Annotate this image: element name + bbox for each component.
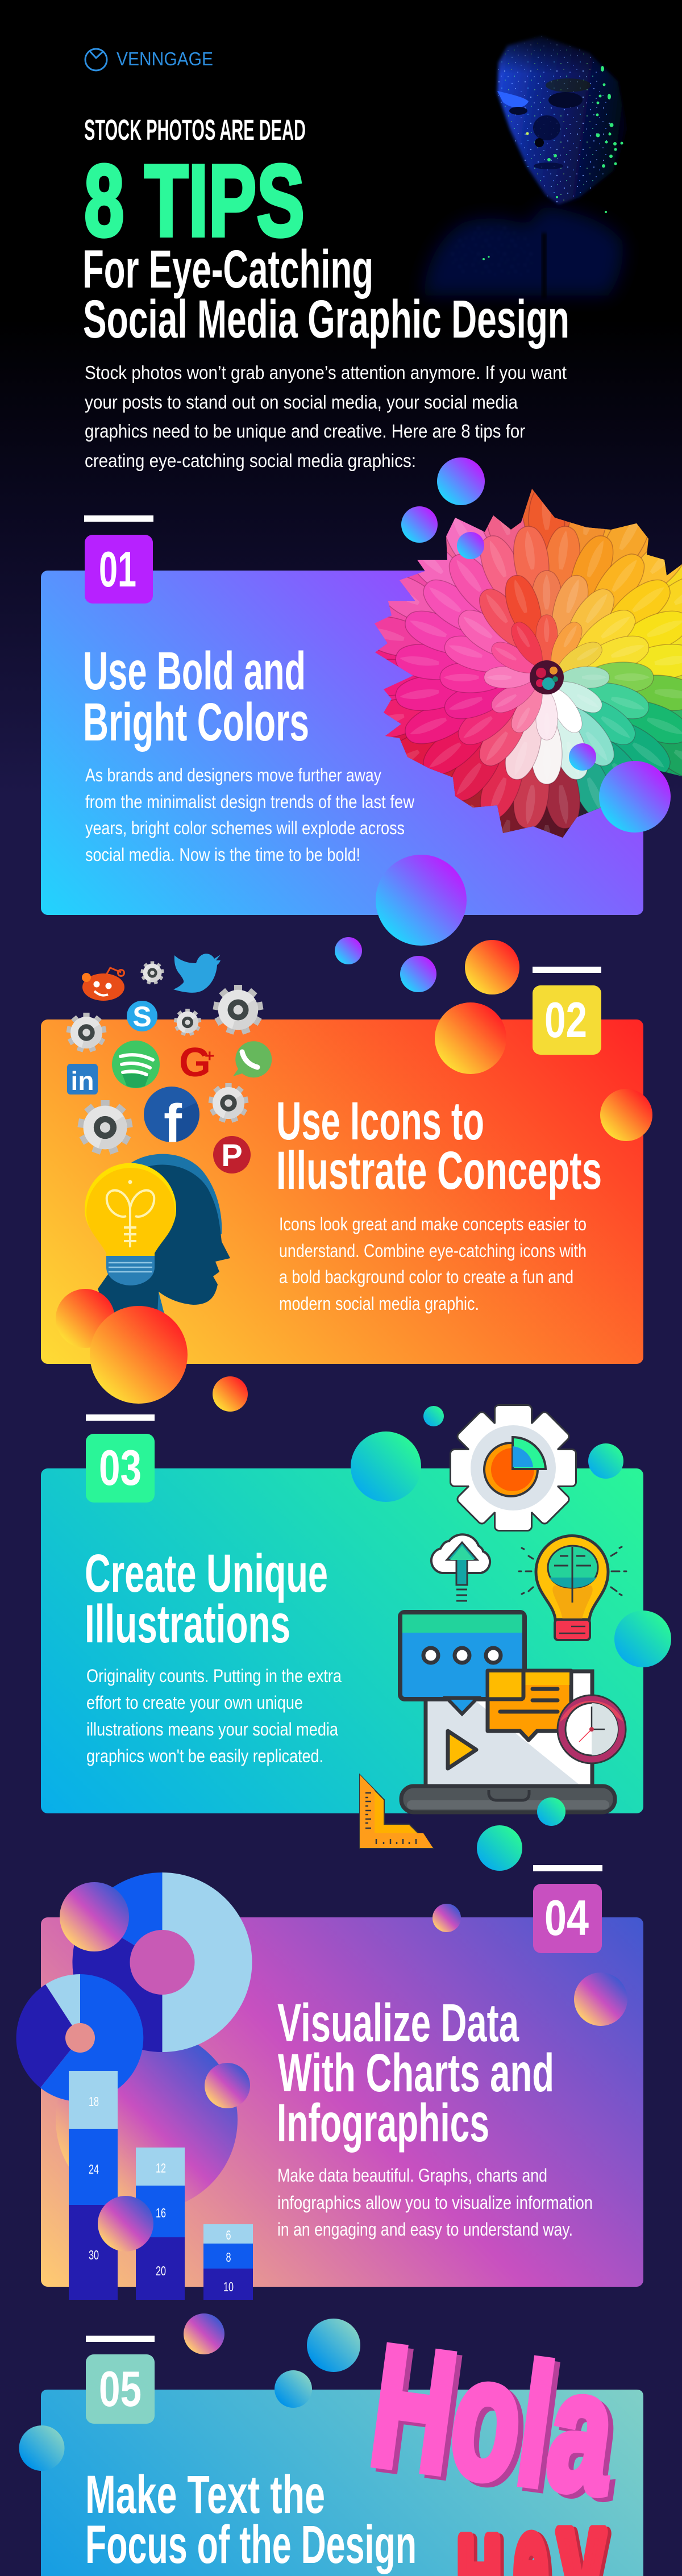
icon: Pinterest bbox=[213, 1136, 251, 1173]
header text block: creating eye-catching social media graphics: bbox=[85, 450, 416, 471]
body text bbox=[86, 1666, 342, 1766]
number bar bbox=[533, 967, 601, 973]
stacked bar chart: 6 bbox=[226, 2228, 231, 2242]
number bar bbox=[86, 1414, 155, 1421]
icon: Twitter bird bbox=[173, 954, 221, 993]
body text: understand. Combine eye-catching icons with bbox=[279, 1241, 587, 1261]
icon: set square ruler bbox=[360, 1775, 433, 1848]
heading: Use Bold and bbox=[83, 641, 306, 701]
icon: orange chat bubble bbox=[486, 1671, 571, 1740]
heading: With Charts and bbox=[278, 2043, 554, 2103]
body text: graphics won't be easily replicated. bbox=[86, 1746, 323, 1766]
panel background bbox=[41, 571, 643, 915]
number badge 02: 02 bbox=[544, 992, 587, 1048]
header text block: graphics need to be unique and creative. Here are 8 tips for bbox=[85, 421, 525, 442]
icon: Reddit bbox=[82, 968, 124, 1001]
heading: Bright Colors bbox=[83, 692, 309, 752]
body text: effort to create your own unique bbox=[86, 1692, 303, 1713]
number bar bbox=[84, 515, 153, 522]
icon: cloud upload bbox=[431, 1534, 490, 1601]
body text: infographics allow you to visualize information bbox=[277, 2192, 593, 2213]
panel: tip 2 bbox=[41, 940, 652, 1412]
decorative gradient circles bbox=[60, 1882, 627, 2354]
icon: laptop base bbox=[401, 1786, 615, 1812]
donut chart: large bbox=[72, 1872, 252, 2052]
icon: LinkedIn: in bbox=[71, 1066, 94, 1096]
icon: Pinterest: P bbox=[221, 1137, 243, 1173]
stacked bar chart bbox=[69, 2071, 253, 2300]
header text block: STOCK PHOTOS ARE DEAD bbox=[84, 114, 306, 146]
panel background bbox=[41, 1468, 643, 1813]
number badge 03 bbox=[86, 1434, 155, 1503]
body text: illustrations means your social media bbox=[86, 1719, 338, 1739]
panel background bbox=[41, 2390, 643, 2576]
stacked bar chart: 24 bbox=[89, 2162, 99, 2177]
large background circle bbox=[56, 2029, 238, 2211]
heading: Create Unique bbox=[85, 1543, 328, 1604]
icon: WhatsApp bbox=[233, 1041, 272, 1077]
body text bbox=[279, 1214, 587, 1314]
panel: tip 1 bbox=[41, 433, 682, 992]
decorative gradient circles bbox=[56, 940, 652, 1412]
icon: Skype: S bbox=[132, 1001, 152, 1033]
illustration: Hey lettering bbox=[458, 2525, 612, 2576]
icon: blue chat bubble bbox=[400, 1612, 525, 1714]
icon: Spotify bbox=[112, 1041, 160, 1088]
icon: Skype bbox=[127, 1001, 157, 1033]
heading: Visualize Data bbox=[277, 1993, 519, 2053]
number badge 05 bbox=[86, 2354, 155, 2424]
stacked bar chart: 10 bbox=[223, 2279, 234, 2294]
stacked bar chart: 18 bbox=[89, 2094, 99, 2109]
heading bbox=[277, 1993, 554, 2153]
body text: from the minimalist design trends of the last few bbox=[85, 792, 415, 812]
number bar bbox=[533, 1865, 602, 1871]
heading: Focus of the Design bbox=[85, 2515, 417, 2575]
decorative gradient circles bbox=[351, 1406, 671, 1667]
icon: play triangle bbox=[448, 1731, 476, 1768]
number badge 04 bbox=[533, 1884, 602, 1953]
logo: Venngage bbox=[85, 48, 213, 70]
icon: gear with pie chart bbox=[451, 1406, 575, 1530]
icon: gears bbox=[66, 962, 264, 1155]
decorative gradient circles bbox=[19, 2319, 360, 2471]
number badge 01 bbox=[85, 535, 153, 604]
photo: glowing speckled face bbox=[423, 31, 631, 298]
icon: Facebook: f bbox=[164, 1093, 182, 1154]
heading bbox=[85, 1543, 328, 1654]
heading bbox=[88, 2474, 415, 2574]
number bar bbox=[86, 2336, 155, 2342]
panel background bbox=[41, 1019, 643, 1364]
body text: in an engaging and easy to understand way. bbox=[277, 2219, 573, 2240]
header text block: your posts to stand out on social media, your social media bbox=[85, 392, 518, 413]
heading: Illustrations bbox=[85, 1594, 290, 1654]
icon: light bulb with brain bbox=[519, 1535, 626, 1640]
body text: Make data beautiful. Graphs, charts and bbox=[277, 2165, 547, 2186]
panel background bbox=[41, 1917, 643, 2287]
stacked bar chart: 8 bbox=[226, 2250, 231, 2265]
illustration: Hola lettering bbox=[371, 2342, 616, 2503]
number badge 03: 03 bbox=[99, 1439, 142, 1496]
header text block bbox=[82, 114, 569, 471]
number badge 05: 05 bbox=[99, 2361, 142, 2417]
icon: Facebook bbox=[144, 1087, 199, 1154]
header text block: For Eye-Catching bbox=[82, 239, 373, 299]
body text bbox=[277, 2165, 593, 2240]
panel: tip 5 bbox=[19, 2309, 643, 2576]
decorative gradient circles bbox=[477, 1797, 565, 1871]
header text block: 8 TIPS bbox=[84, 144, 305, 258]
icon: laptop screen bbox=[426, 1671, 592, 1788]
number badge 04: 04 bbox=[544, 1890, 589, 1946]
panel: tip 3 bbox=[41, 1406, 671, 1871]
header text block: Stock photos won’t grab anyone’s attention anymore. If you want bbox=[85, 362, 567, 383]
heading bbox=[83, 641, 309, 752]
stacked bar chart: 20 bbox=[156, 2263, 166, 2278]
body text: As brands and designers move further away bbox=[85, 765, 381, 785]
heading bbox=[276, 1091, 602, 1201]
donut chart: small bbox=[16, 1974, 143, 2101]
logo: Venngage: VENNGAGE bbox=[117, 48, 213, 69]
number badge 01: 01 bbox=[99, 541, 136, 597]
icon: clock bbox=[558, 1695, 626, 1763]
panel: tip 4 bbox=[16, 1865, 643, 2354]
decorative gradient circles bbox=[335, 457, 671, 992]
body text: years, bright color schemes will explode across bbox=[85, 818, 405, 838]
icon: Google Plus: + bbox=[205, 1047, 215, 1066]
body text: Originality counts. Putting in the extra bbox=[86, 1666, 342, 1686]
body text: social media. Now is the time to be bold! bbox=[85, 844, 360, 865]
heading: Infographics bbox=[277, 2093, 489, 2153]
heading: Make Text the bbox=[85, 2465, 325, 2525]
body text: modern social media graphic. bbox=[279, 1293, 479, 1314]
stacked bar chart: 30 bbox=[89, 2248, 99, 2262]
number badge 02 bbox=[533, 985, 601, 1055]
flower photo bbox=[375, 489, 682, 838]
stacked bar chart: 16 bbox=[156, 2205, 166, 2220]
stacked bar chart: 12 bbox=[156, 2161, 166, 2175]
body text: Icons look great and make concepts easier to bbox=[279, 1214, 587, 1234]
body text: a bold background color to create a fun and bbox=[279, 1267, 573, 1287]
icon: head with light bulb bbox=[85, 1154, 230, 1330]
icon: Google Plus: G bbox=[179, 1040, 211, 1085]
body text bbox=[85, 765, 415, 865]
heading: Use Icons to bbox=[276, 1091, 484, 1151]
